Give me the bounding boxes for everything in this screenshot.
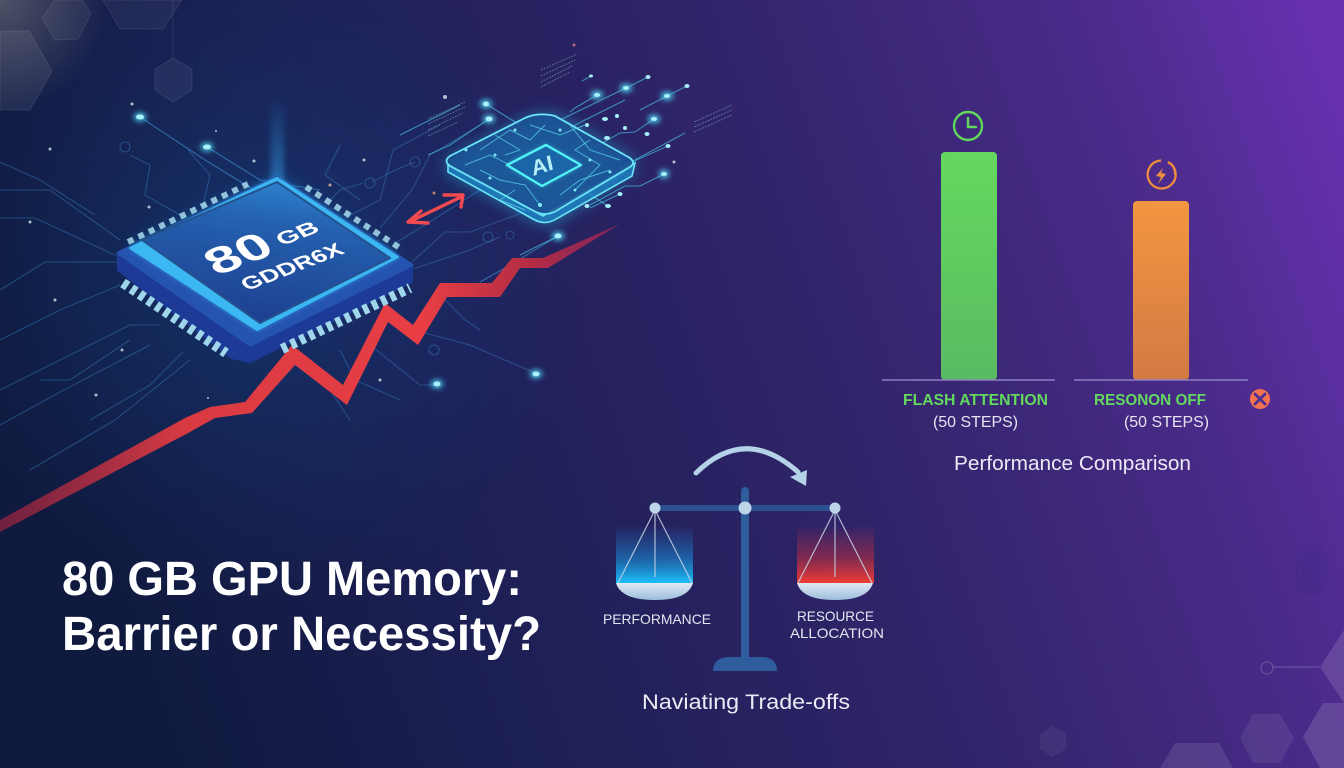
label: resonon steps: (50 STEPS): [1124, 414, 1209, 431]
chip label: GDDR6X: [236, 240, 349, 295]
scale beam: [655, 505, 835, 511]
label: flash attention: FLASH ATTENTION: [903, 392, 1048, 409]
AI chip glow: [447, 115, 633, 224]
chip body: [118, 177, 412, 362]
double-headed red arrow: [408, 195, 463, 223]
circuit traces: around memory chip: [0, 117, 558, 470]
upper pins: [128, 184, 400, 248]
hexagon decorations: bottom right: [1040, 546, 1344, 768]
right pan bowl: [797, 583, 873, 600]
green bar: [941, 152, 997, 380]
right pan glow: [797, 525, 874, 583]
scale post: [741, 487, 749, 662]
icon: clock: [954, 112, 982, 140]
panel: performance comparison chart: [882, 112, 1270, 475]
title: Barrier or Necessity?: [62, 608, 541, 661]
AI chip side: [448, 163, 635, 222]
icon: x mark: [1250, 389, 1270, 409]
scale caption: Naviating Trade-offs: [642, 691, 850, 714]
pan strings: [618, 510, 872, 583]
left pan bowl: [616, 583, 693, 600]
label: resource allocation: [790, 608, 884, 641]
label: resource allocation: ALLOCATION: [790, 625, 884, 641]
AI chip top: [446, 114, 633, 214]
scale base: [713, 657, 777, 671]
label: resonon off: RESONON OFF: [1094, 392, 1206, 409]
panel: trade-off scale: [603, 449, 884, 714]
icon: 80 GB memory chip: [118, 177, 412, 362]
left pan glow: [616, 525, 693, 583]
AI chip inner traces: [465, 125, 620, 210]
title: 80 GB GPU Memory:: [62, 553, 522, 606]
axis baselines: [882, 379, 1248, 381]
cyan rim: [130, 178, 398, 330]
chip label: GB: [271, 218, 324, 250]
orange bar: [1133, 201, 1189, 380]
data readout lines: [428, 54, 732, 136]
label: resource allocation: RESOURCE: [797, 608, 874, 624]
chart caption: Performance Comparison: [954, 453, 1191, 475]
icon: power bolt: [1148, 160, 1176, 188]
top plate: [142, 182, 390, 323]
label: performance: PERFORMANCE: [603, 611, 711, 627]
chip glow: [130, 178, 398, 330]
glowing nodes: [134, 84, 673, 388]
hexagon decorations: top left: [0, 0, 192, 110]
red performance line: [0, 224, 620, 532]
curved arrow: [696, 449, 807, 486]
pivot points: [650, 502, 840, 514]
circuit traces: around AI chip: [400, 76, 687, 255]
AI chip: [446, 114, 635, 224]
chip label: [194, 218, 349, 295]
title: [62, 553, 541, 661]
lower pins: [123, 283, 410, 353]
AI core glow: [507, 145, 581, 186]
small sparkle dots: [28, 44, 676, 399]
AI chip inner dots: [464, 128, 612, 207]
cyan rim glow: [130, 178, 398, 330]
blue glow behind chip: [0, 0, 700, 640]
vertical light beam above chip: [271, 95, 284, 183]
chip label: 80: [194, 224, 283, 283]
label: flash steps: (50 STEPS): [933, 414, 1018, 431]
AI core: [507, 145, 581, 186]
AI chip: AI: [529, 150, 555, 181]
